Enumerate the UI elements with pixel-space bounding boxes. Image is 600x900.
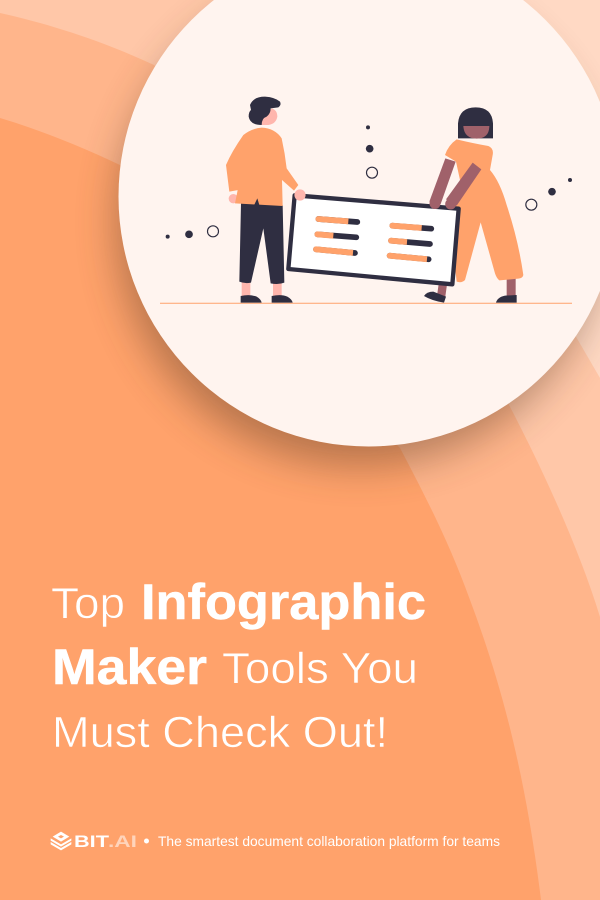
tilted board — [288, 195, 459, 284]
title — [51, 574, 426, 757]
title: Infographic — [141, 574, 426, 630]
decorative dots middle and right — [366, 125, 572, 210]
ground line — [160, 302, 572, 304]
title: Maker — [52, 639, 207, 695]
footer brand line — [51, 832, 500, 851]
man figure — [226, 97, 298, 303]
tagline: The smartest document collaboration platform for teams — [158, 833, 500, 849]
woman figure — [424, 107, 523, 303]
brand name — [74, 832, 137, 851]
separator dot — [144, 838, 149, 844]
progress bars — [313, 216, 431, 259]
title: Tools You — [222, 645, 418, 693]
illustration — [160, 97, 572, 303]
title: Top — [51, 580, 125, 628]
circle shadow — [116, 0, 600, 466]
title: Must Check Out! — [52, 709, 388, 757]
brand name: .AI — [108, 832, 137, 851]
decorative dots left — [166, 226, 218, 239]
hands on board — [294, 189, 456, 210]
icon: stacked layers logo — [51, 832, 71, 850]
brand name: BIT — [74, 832, 110, 851]
hero circle — [118, 0, 600, 446]
